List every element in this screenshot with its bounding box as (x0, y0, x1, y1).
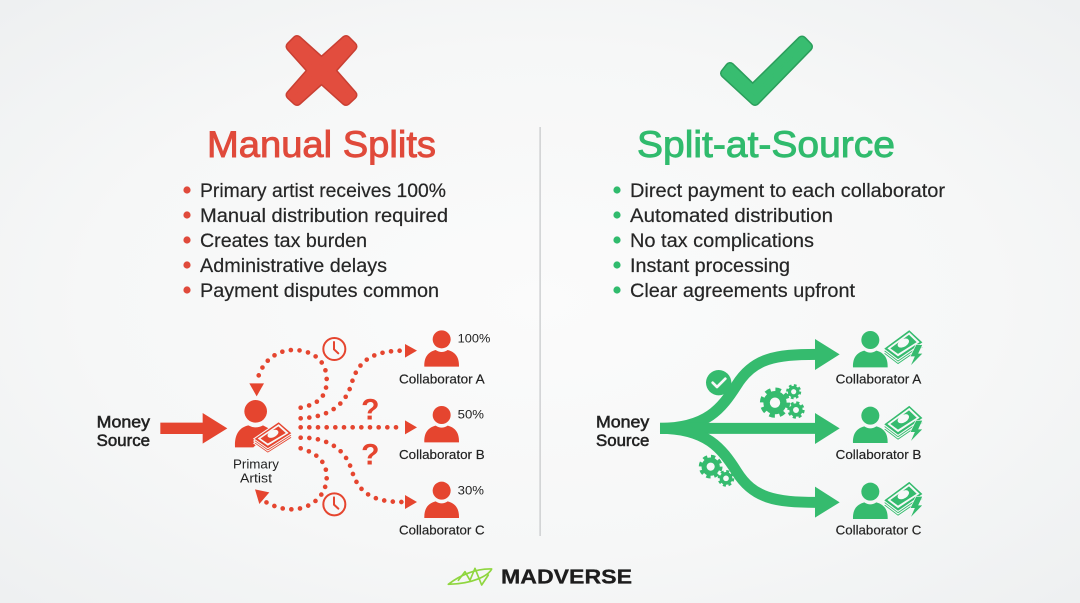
collaborator B (399, 406, 485, 462)
bullet list: split-at-source: No tax complications (630, 231, 814, 252)
collaborator A (836, 329, 923, 386)
collaborator C: Collaborator C (836, 523, 921, 538)
label: primary artist (233, 456, 280, 486)
icon: clock top (323, 338, 345, 360)
icon: green check (725, 40, 808, 101)
collaborator C (836, 481, 923, 538)
heading: Split-at-Source: Split-at-Source (637, 124, 895, 165)
collaborator B (836, 405, 923, 462)
bullet list: manual splits: Manual distribution required (200, 206, 448, 227)
bullet list: manual splits: Payment disputes common (200, 281, 439, 302)
collaborator A (399, 330, 491, 386)
bullet list: manual splits: Creates tax burden (200, 231, 367, 252)
label: money source right (596, 413, 650, 450)
collaborator B: Collaborator B (399, 447, 485, 462)
label: money source left: Source (97, 432, 150, 450)
collaborator B: Collaborator B (836, 447, 921, 462)
label: money source left (97, 413, 151, 450)
logo: Madverse (448, 566, 632, 588)
icon: check badge (706, 370, 731, 395)
bullet list: split-at-source: Direct payment to each collaborator (630, 181, 946, 202)
icon: logo wave (448, 568, 492, 585)
collaborator A: 100% (458, 332, 491, 346)
icon: gears lower (701, 457, 733, 485)
icon: question marks (361, 393, 379, 471)
icon: primary artist with cash (235, 400, 292, 453)
collaborator B: 50% (458, 408, 484, 422)
icon: question marks: ? (361, 393, 379, 426)
collaborator C: 30% (458, 484, 484, 498)
bullet list: manual splits (183, 181, 448, 302)
arrowheads (249, 344, 417, 509)
collaborator C: Collaborator C (399, 523, 485, 538)
collaborator A: Collaborator A (399, 371, 485, 386)
label: money source right: Source (596, 432, 649, 450)
diagram: split-at-source flow (596, 329, 923, 538)
bullet list: split-at-source: Clear agreements upfront (630, 281, 856, 302)
bullet list: manual splits: Primary artist receives 100% (200, 181, 446, 202)
bullet list: manual splits: Administrative delays (200, 256, 387, 277)
bullet list: split-at-source: Automated distribution (630, 206, 833, 227)
label: primary artist: Artist (240, 471, 272, 486)
collaborator C (399, 482, 485, 538)
heading: Manual Splits: Manual Splits (207, 124, 436, 165)
center divider (540, 127, 541, 536)
dotted routes (257, 350, 404, 509)
label: money source left: Money (97, 413, 151, 431)
bullet list: split-at-source: Instant processing (630, 256, 790, 277)
collaborator A: Collaborator A (836, 371, 922, 386)
bullet list: split-at-source (613, 181, 946, 302)
wordmark: MADVERSE (501, 566, 632, 588)
diagram: manual splits flow (97, 330, 491, 538)
icon: gears upper (762, 385, 803, 417)
label: primary artist: Primary (233, 456, 280, 471)
branching arrows (660, 339, 840, 518)
arrow: money to artist (160, 413, 227, 444)
icon: clock bottom (323, 493, 345, 515)
icon: question marks: ? (361, 438, 379, 471)
icon: red cross (290, 40, 352, 101)
label: money source right: Money (596, 413, 650, 431)
